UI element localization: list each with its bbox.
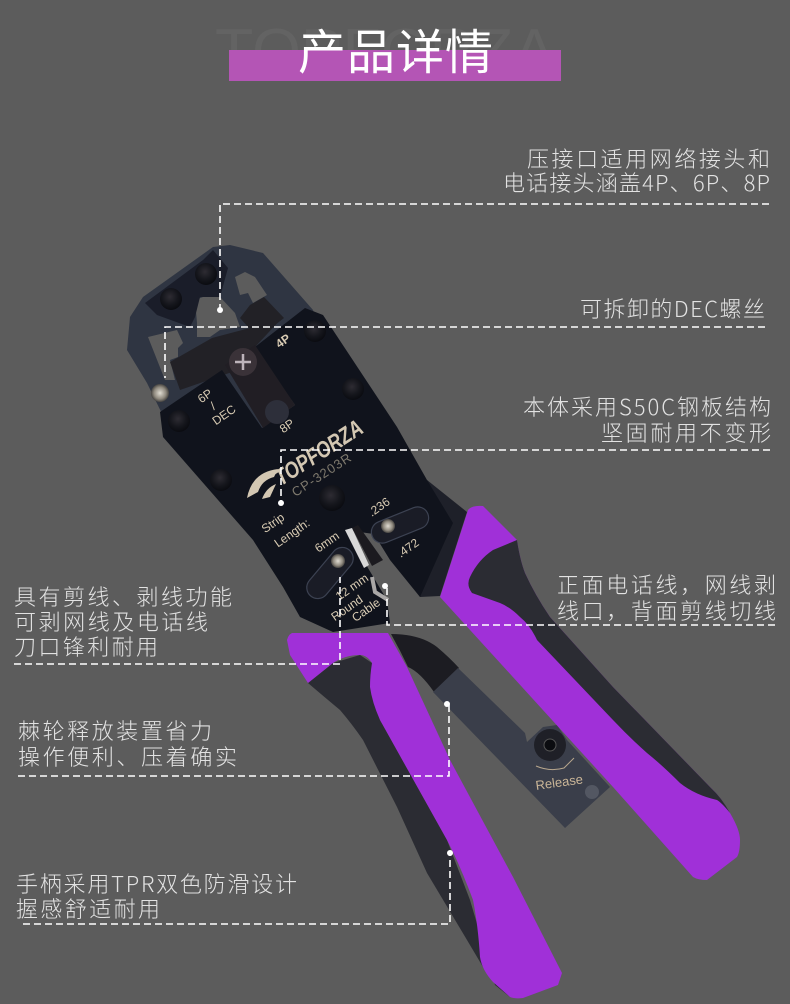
center clamp with philips screw [225,345,295,428]
callout: wire stripper: 可剥网线及电话线 [14,605,208,637]
leader: wire stripper [14,577,340,664]
plate markings: Cable [349,595,383,625]
callout: crimp opening: 电话接头涵盖4P、6P、8P [503,166,770,198]
wire hook [372,577,388,600]
cutting blade [345,525,383,568]
title block [215,13,561,86]
plate markings: Strip [259,510,287,536]
callout: wire stripper [14,580,232,662]
callout: crimp opening: 压接口适用网络接头和 [527,142,770,174]
plate screws [160,263,364,511]
plate markings: Length: [272,516,312,550]
callout: front notch [557,568,776,626]
callout: crimp opening [503,142,770,198]
plate markings: Round [328,592,366,624]
ghost brand watermark: TOPFORZA [215,17,556,86]
leader: crimp opening [217,204,769,313]
plate markings: 12 mm [333,571,371,603]
leader: DEC screw [165,327,765,378]
top jaw plate [145,250,228,327]
callout: wire stripper: 具有剪线、剥线功能 [14,580,232,612]
plate markings: 4P [273,331,293,351]
plate markings: 8P [277,416,297,436]
title: 产品详情 [298,13,493,83]
callout: ratchet [18,714,237,772]
callout: handle: 握感舒适耐用 [16,892,160,924]
ratchet release bar: Release [535,771,584,793]
jaw openings [148,272,267,380]
silver screws [151,384,395,568]
callout: steel body [523,390,771,448]
back jaw [127,245,330,440]
front plate [160,308,453,632]
callout: steel body: 坚固耐用不变形 [601,416,771,448]
plate markings: .236 [365,494,393,519]
leader: front notch [382,583,775,625]
callout: front notch: 线口，背面剪线切线 [557,594,776,626]
leader: handle [23,850,453,924]
plate markings: / [208,399,219,413]
crimping tool [127,245,740,998]
plate markings: .472 [394,535,422,560]
brand logo: CP-3203R [289,450,355,500]
plate markings: 6mm [312,529,342,555]
back plate shoulder [400,480,467,597]
brand logo [247,414,368,500]
callout: ratchet: 操作便利、压着确实 [18,740,237,772]
purple title bar [229,50,561,81]
callout: steel body: 本体采用S50C钢板结构 [523,390,771,422]
leader: ratchet [18,701,450,776]
callout: ratchet: 棘轮释放装置省力 [18,714,212,746]
right handle [440,506,740,880]
plate markings: 6P [195,386,215,406]
jaw dies [170,297,284,390]
ratchet release bar [391,634,610,828]
callout: wire stripper: 刀口锋利耐用 [14,630,158,662]
brand logo: TOPFORZA [270,414,368,490]
callout: handle: 手柄采用TPR双色防滑设计 [16,867,297,899]
plate markings [195,331,422,625]
adjuster slots [302,504,432,603]
leader: steel body [278,450,770,506]
plate markings: DEC [210,402,239,428]
callout: DEC screw: 可拆卸的DEC螺丝 [580,292,765,324]
callout: handle [16,867,297,924]
callout: front notch: 正面电话线，网线剥 [557,568,776,600]
left handle [287,633,562,998]
